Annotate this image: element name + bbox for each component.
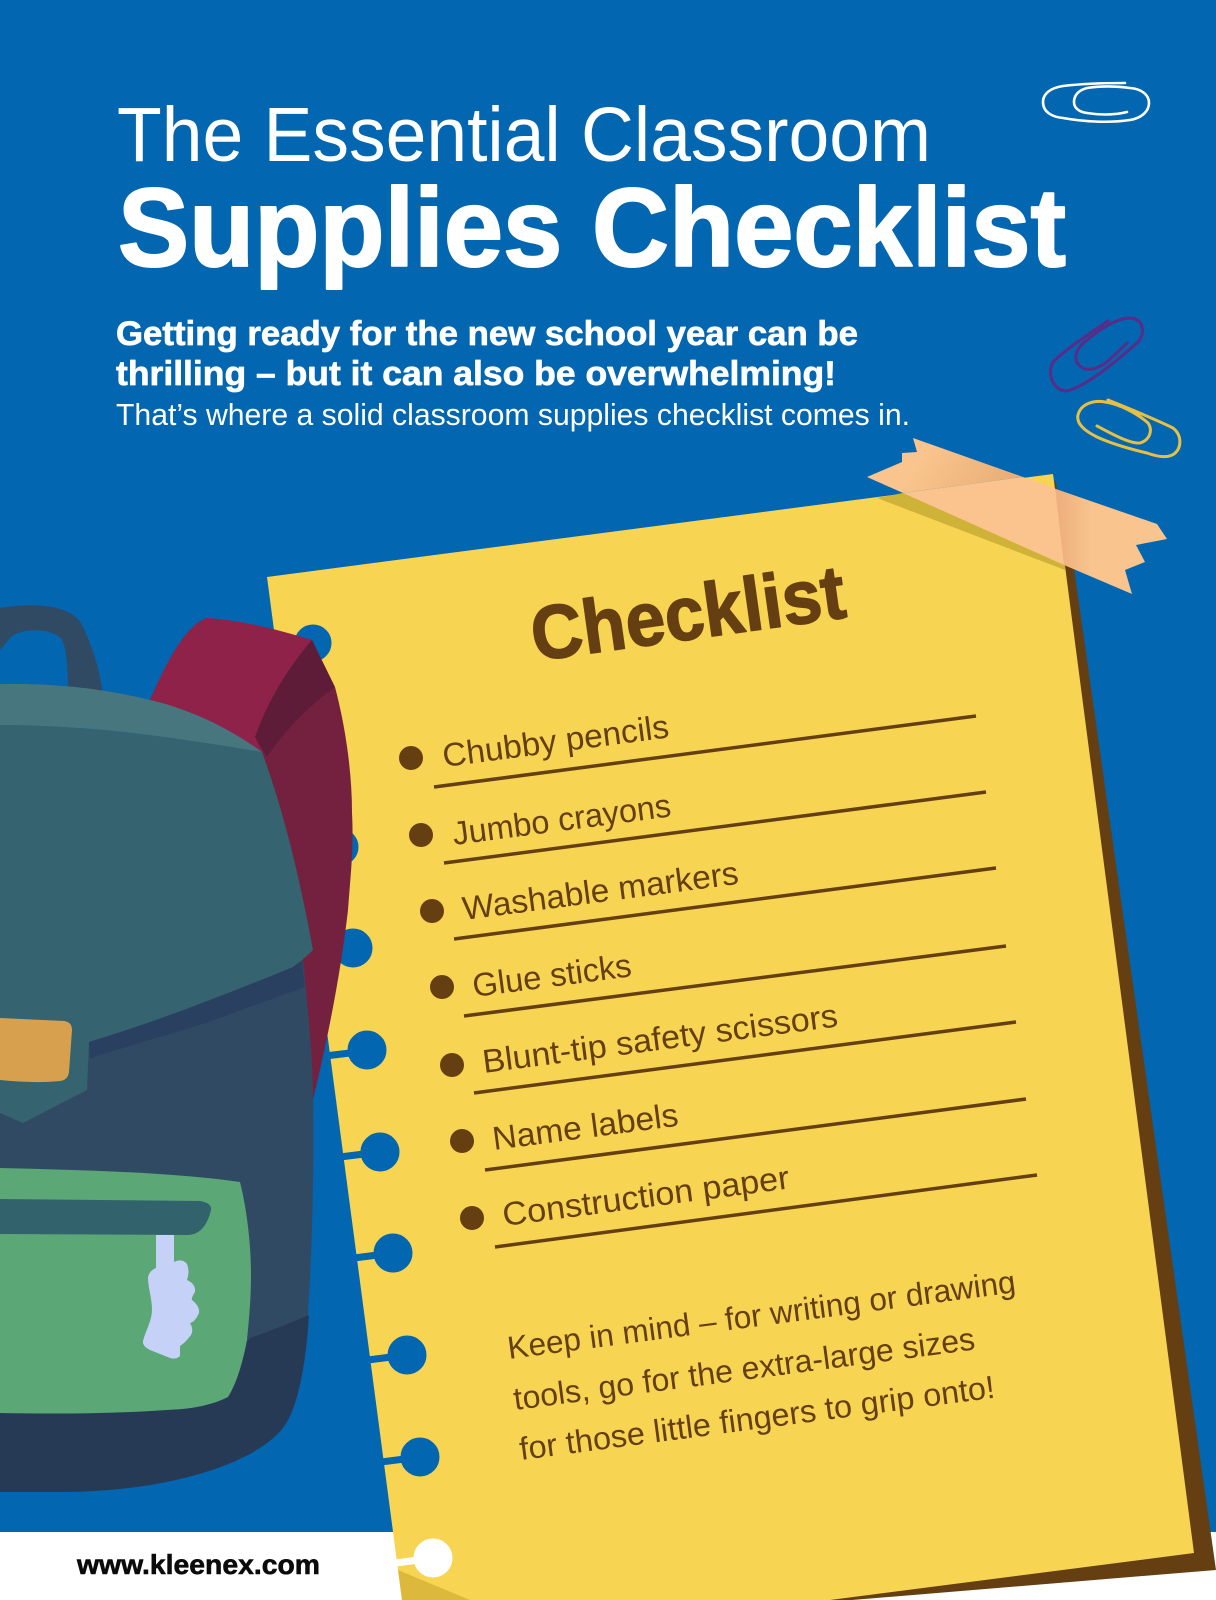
intro text xyxy=(116,315,910,432)
flap highlight xyxy=(0,684,262,752)
backpack side xyxy=(255,687,353,1100)
strap dark band xyxy=(255,640,335,757)
binder holes xyxy=(295,625,439,1476)
icon: yellow paper clip xyxy=(1078,400,1180,457)
item: washable markers: Washable markers xyxy=(460,854,741,927)
front pocket xyxy=(0,1168,251,1414)
paper sheet xyxy=(267,474,1216,1600)
tip note xyxy=(505,1263,1018,1467)
item: glue sticks: Glue sticks xyxy=(470,946,634,1004)
backpack body xyxy=(0,960,313,1492)
tip note: for those little fingers to grip onto! xyxy=(517,1369,997,1467)
pocket zipper xyxy=(0,1199,211,1235)
flap shadow xyxy=(89,962,305,1058)
backpack flap xyxy=(0,725,313,1123)
intro text: thrilling – but it can also be overwhelming! xyxy=(116,355,836,393)
zipper pull xyxy=(143,1235,199,1359)
item: blunt-tip safety scissors: Blunt-tip safety scissors xyxy=(480,997,840,1080)
intro text: That’s where a solid classroom supplies checklist comes in. xyxy=(116,397,910,432)
backpack strap front xyxy=(150,618,312,752)
buckle xyxy=(0,1018,72,1082)
backpack xyxy=(0,605,353,1492)
backpack base xyxy=(0,1315,309,1492)
checklist items xyxy=(399,707,1037,1247)
item: chubby pencils: Chubby pencils xyxy=(440,707,671,774)
item: name labels: Name labels xyxy=(490,1096,680,1157)
item: name labels xyxy=(450,1096,1026,1170)
item: chubby pencils xyxy=(399,707,976,787)
item: construction paper xyxy=(460,1159,1037,1247)
item: construction paper: Construction paper xyxy=(500,1159,791,1233)
item: jumbo crayons: Jumbo crayons xyxy=(450,787,673,852)
website url: www.kleenex.com xyxy=(76,1549,320,1580)
paper face xyxy=(267,474,1194,1600)
item: washable markers xyxy=(420,854,996,939)
backpack handle xyxy=(0,605,103,695)
tip note: tools, go for the extra-large sizes xyxy=(511,1321,977,1417)
icon: white paper clip xyxy=(1043,83,1149,122)
icon: purple paper clip xyxy=(1051,318,1142,391)
fold at bottom corner xyxy=(398,1570,470,1600)
tape shadow xyxy=(877,493,1065,570)
tip note: Keep in mind – for writing or drawing xyxy=(505,1263,1018,1366)
title: Supplies Checklist xyxy=(118,166,1066,290)
tape xyxy=(867,438,1167,594)
item: glue sticks xyxy=(430,946,1006,1016)
title xyxy=(117,92,1066,290)
intro text: Getting ready for the new school year can be xyxy=(116,315,858,353)
item: jumbo crayons xyxy=(409,787,986,863)
checklist heading: Checklist xyxy=(526,550,850,678)
footer band xyxy=(0,1532,1216,1600)
paper shadow edge xyxy=(700,480,1216,1600)
title: The Essential Classroom xyxy=(117,92,931,178)
white binder hole xyxy=(396,1539,452,1577)
item: blunt-tip safety scissors xyxy=(440,997,1016,1093)
